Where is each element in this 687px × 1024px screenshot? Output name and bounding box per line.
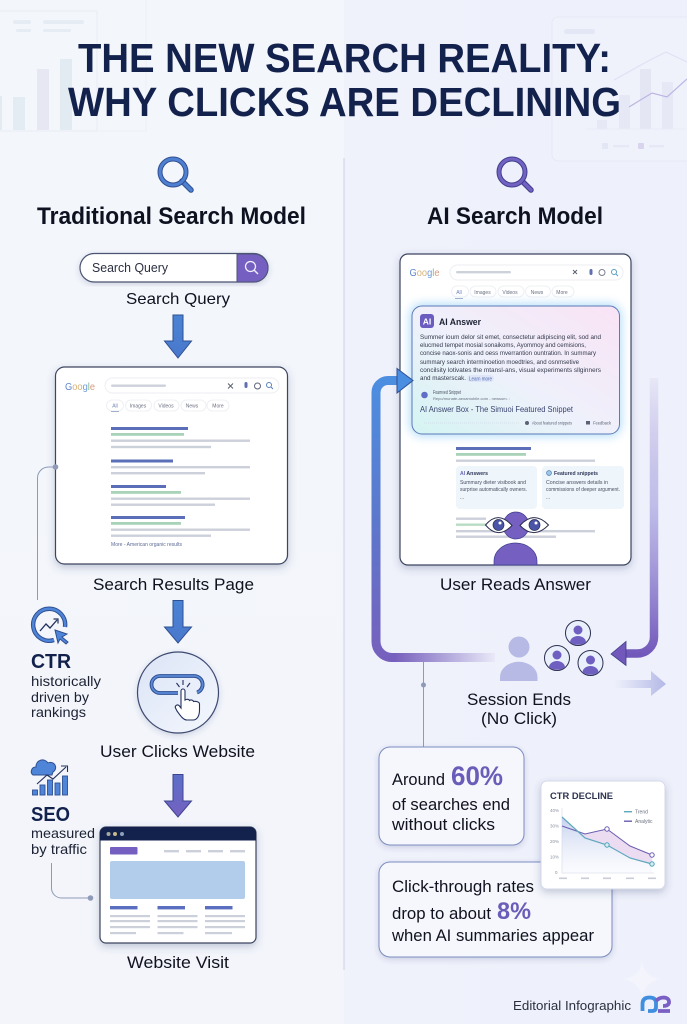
label: session ends: Session Ends <box>467 691 571 709</box>
card: AI answers: AI Answers <box>460 471 488 477</box>
line chart <box>562 817 654 873</box>
axis labels: 40% <box>550 808 559 813</box>
icon: purple magnifier <box>499 159 531 190</box>
label: website visit: Website Visit <box>127 954 229 972</box>
card: featured snippets: Concise answers details in <box>546 480 608 486</box>
legend: Trend <box>635 810 648 816</box>
search box <box>450 265 623 280</box>
callout: SEO <box>31 804 95 857</box>
flow arrow: right side to users <box>611 378 654 666</box>
stat card: 8 percent: Click-through rates <box>392 878 534 896</box>
card: AI answers: ... <box>460 495 464 501</box>
label: search query: Search Query <box>126 291 230 308</box>
tabs: All <box>456 290 462 296</box>
divider <box>343 158 345 970</box>
arrow: to results page <box>164 315 192 358</box>
AI answer body text: elucmed tempet mosial sonaikoms, Ayommoy and cemisions, <box>420 342 586 349</box>
AI answer heading: AI Answer <box>439 317 481 327</box>
axis labels: 30% <box>550 824 559 828</box>
callout: CTR: driven by <box>31 689 89 705</box>
icon: reader with eyes <box>486 512 548 565</box>
card: AI answers <box>456 466 537 509</box>
card: featured snippets: Featured snippets <box>554 471 598 477</box>
stat card: 8 percent <box>379 862 612 957</box>
connector: SEO to website <box>52 863 93 901</box>
arrow: to click <box>164 600 192 643</box>
AI results page mockup <box>400 254 631 565</box>
arrow: to website <box>164 774 192 817</box>
callout: CTR: rankings <box>31 704 86 720</box>
card: featured snippets: ... <box>546 495 550 501</box>
title <box>68 35 621 125</box>
tabs: All <box>112 404 118 410</box>
tabs: More <box>212 404 224 410</box>
flow arrow: back to AI answer <box>376 368 495 658</box>
background chart: top left <box>0 0 146 131</box>
axis labels <box>550 808 559 875</box>
AI answer body text: Learn more <box>469 376 492 382</box>
AI answer body text: and masterscak. <box>420 375 466 382</box>
featured snippet source: Repo/munate-aeoamobile.com - newsom. : <box>433 397 510 401</box>
AI answer box <box>410 304 621 436</box>
arrow: session exit <box>614 671 666 696</box>
panel: traditional search model <box>31 159 306 972</box>
callout: SEO: measured <box>31 825 95 841</box>
tabs: News <box>186 404 199 410</box>
axis labels: 0 <box>555 870 558 875</box>
legend <box>624 810 653 825</box>
AI answer body text: concilsity lotivates the mtansl-ans, visual experiments sllginners <box>420 367 601 374</box>
callout: CTR <box>31 651 101 720</box>
decorative sparkle <box>623 961 661 998</box>
AI answer body text: summary search interminoetion moedtries, and osnmsetive <box>420 359 580 366</box>
tabs: More <box>556 290 568 296</box>
card: AI answers: surprise automatically owners. <box>460 487 527 493</box>
connector: session to stat card <box>421 662 426 747</box>
featured snippet source <box>420 390 612 426</box>
background chart: top right <box>552 17 687 161</box>
icon: SEO <box>31 760 68 795</box>
AI answer body text: concise naox-sonis and oess mverrantion ountration. In summary <box>420 350 597 357</box>
website mockup <box>100 827 256 943</box>
stat card: 8 percent: when AI summaries appear <box>391 927 595 945</box>
card: featured snippets <box>542 466 624 509</box>
stat card: 8 percent: drop to about <box>392 905 491 923</box>
search results page mockup <box>56 367 288 564</box>
connector: CTR to results page <box>38 464 58 600</box>
google logo: Google <box>65 381 95 393</box>
stat card: 60 percent: without clicks <box>391 816 495 834</box>
tabs: Images <box>130 404 147 410</box>
footer credit: Editorial Infographic <box>513 998 632 1013</box>
card: AI answers: Summary dieter visibook and <box>460 480 526 486</box>
title: THE NEW SEARCH REALITY: <box>78 35 611 81</box>
organic results <box>111 427 250 548</box>
heading: traditional search model: Traditional Search Model <box>37 203 306 230</box>
tabs: Videos <box>158 404 174 410</box>
lower results <box>456 447 595 538</box>
axis labels: 20% <box>550 839 559 844</box>
tabs: Images <box>474 290 491 296</box>
tabs <box>452 286 574 299</box>
x ticks <box>559 878 656 879</box>
chart card: CTR decline <box>541 781 665 889</box>
featured snippet source: AI Answer Box - The Simuoi Featured Snippet <box>420 405 574 414</box>
google logo: Google <box>410 267 440 279</box>
legend: Analytic <box>635 819 653 825</box>
stat card: 60 percent: of searches end <box>392 796 510 814</box>
icon: fading user <box>500 636 538 681</box>
featured snippet source: Foamved Snippet <box>433 390 461 396</box>
stat card: 60 percent: Around <box>392 771 445 789</box>
callout: SEO: by traffic <box>31 841 87 857</box>
AI badge <box>420 314 434 328</box>
axis labels: 10% <box>550 854 559 860</box>
label: search results page: Search Results Page <box>93 576 254 594</box>
featured snippet source: Feedback <box>593 420 612 426</box>
organic results: More - American organic results <box>111 542 182 548</box>
label: user clicks website: User Clicks Website <box>100 743 255 761</box>
search bar <box>80 254 268 282</box>
search bar: Search Query <box>92 261 169 275</box>
chart title: CTR DECLINE <box>550 791 613 802</box>
stat card: 8 percent: 8% <box>497 898 531 925</box>
logo <box>642 998 670 1011</box>
AI badge: AI <box>423 316 431 326</box>
callout: SEO: SEO <box>31 804 70 826</box>
icon: CTR <box>33 609 68 644</box>
stat card: 60 percent: 60% <box>451 761 503 791</box>
tabs <box>106 400 229 412</box>
title: WHY CLICKS ARE DECLINING <box>68 79 621 125</box>
icon: user click circle <box>138 652 218 733</box>
icon: group of users <box>544 620 603 676</box>
search box <box>105 378 279 393</box>
callout: CTR: CTR <box>31 651 72 673</box>
axes <box>562 808 654 873</box>
panel: AI search model <box>376 159 670 1013</box>
label: session ends <box>467 691 571 728</box>
AI answer body text <box>420 334 602 382</box>
AI answer body text: Summer ioum delor sit emet, consectetur adipiscing elit, sod and <box>420 334 602 341</box>
callout: CTR: historically <box>31 673 101 689</box>
card: featured snippets: commissions of deeper argument. <box>546 487 620 493</box>
label: user reads answer: User Reads Answer <box>440 576 592 594</box>
icon: blue magnifier <box>160 159 191 190</box>
stat card: 60 percent <box>379 747 524 845</box>
featured snippet source: About featured snippets <box>532 420 572 426</box>
tabs: Videos <box>502 290 518 296</box>
tabs: News <box>531 290 544 296</box>
label: session ends: (No Click) <box>481 710 557 728</box>
heading: AI search model: AI Search Model <box>427 203 603 230</box>
